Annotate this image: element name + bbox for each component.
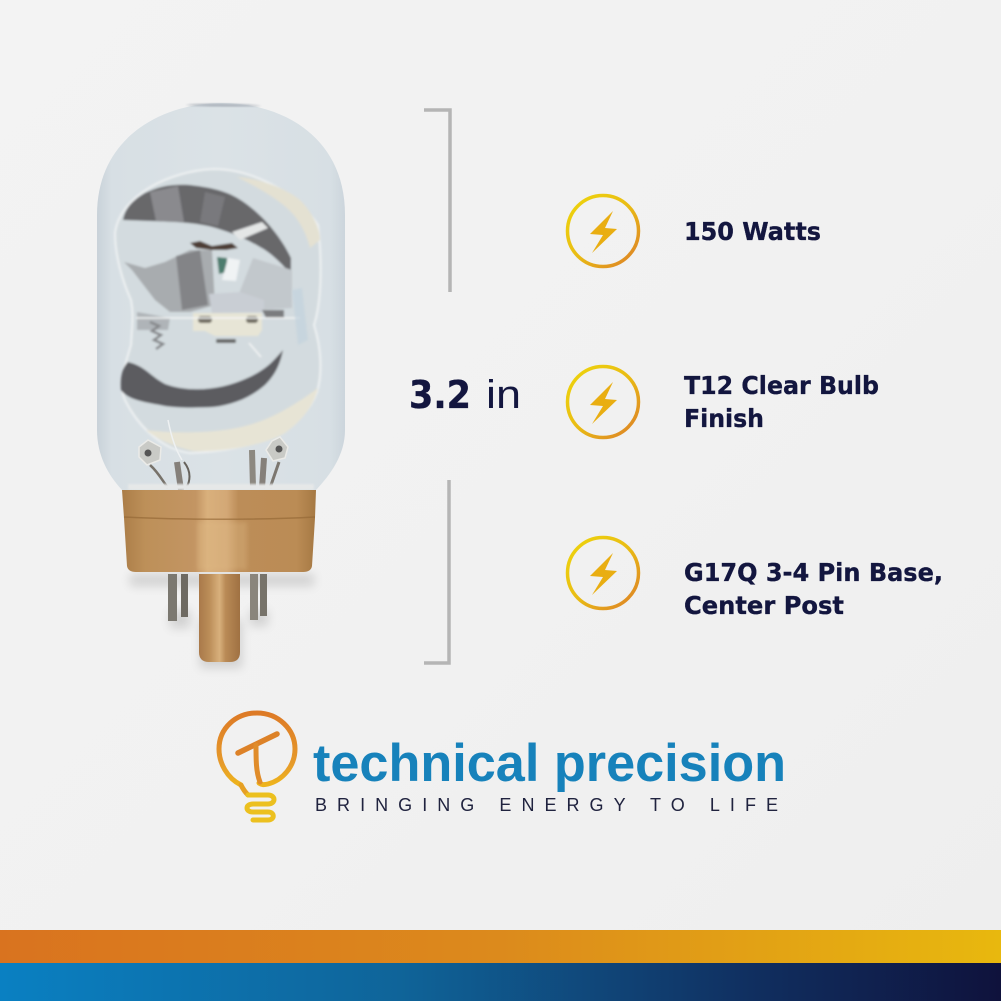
tagline: BRINGING ENERGY TO LIFE — [315, 795, 778, 815]
dimension label: 3.2 — [409, 373, 471, 417]
silver panel right — [238, 258, 292, 310]
right crescent — [237, 177, 320, 248]
logo — [219, 713, 786, 820]
center post — [199, 574, 240, 662]
lower mirror band — [121, 350, 283, 408]
silver coil block — [209, 292, 264, 313]
glass envelope — [97, 103, 345, 490]
top glass tip — [185, 104, 262, 107]
wordmark: technical precision — [313, 734, 786, 793]
label: Center Post — [684, 591, 844, 620]
icon: lightning ring — [568, 538, 638, 608]
footer band: blue — [0, 963, 1001, 1001]
lower cream crescent — [146, 388, 318, 451]
footer band: orange — [0, 930, 1001, 963]
label: Finish — [684, 404, 764, 433]
dimension label: in — [486, 373, 521, 417]
reflector — [115, 169, 321, 453]
green glint — [217, 257, 227, 274]
feature: base type — [568, 538, 943, 620]
base frost line — [128, 484, 314, 490]
right edge reflections — [292, 288, 308, 345]
icon: logo bulb — [219, 713, 295, 820]
bulb shadow — [130, 574, 314, 668]
label: T12 Clear Bulb — [684, 371, 879, 400]
filament core grey cluster — [124, 250, 215, 312]
base rim groove — [124, 517, 315, 519]
bulb photo illustration — [97, 103, 345, 668]
label: G17Q 3-4 Pin Base, — [684, 558, 943, 587]
feature: bulb finish — [568, 366, 879, 438]
support wires and clips — [139, 420, 288, 490]
brass base — [122, 490, 316, 572]
label: 150 Watts — [684, 217, 821, 246]
dimension label — [409, 373, 521, 417]
label — [684, 371, 879, 433]
top dark arc — [190, 241, 238, 250]
base highlight — [197, 522, 247, 570]
feature: wattage — [568, 196, 821, 266]
label — [684, 558, 943, 620]
pins — [168, 574, 267, 621]
icon: lightning ring — [568, 196, 638, 266]
cream filament bar — [193, 313, 262, 336]
dimension bracket — [424, 110, 450, 663]
icon: lightning ring — [568, 366, 638, 438]
upper mirror band — [123, 185, 291, 274]
